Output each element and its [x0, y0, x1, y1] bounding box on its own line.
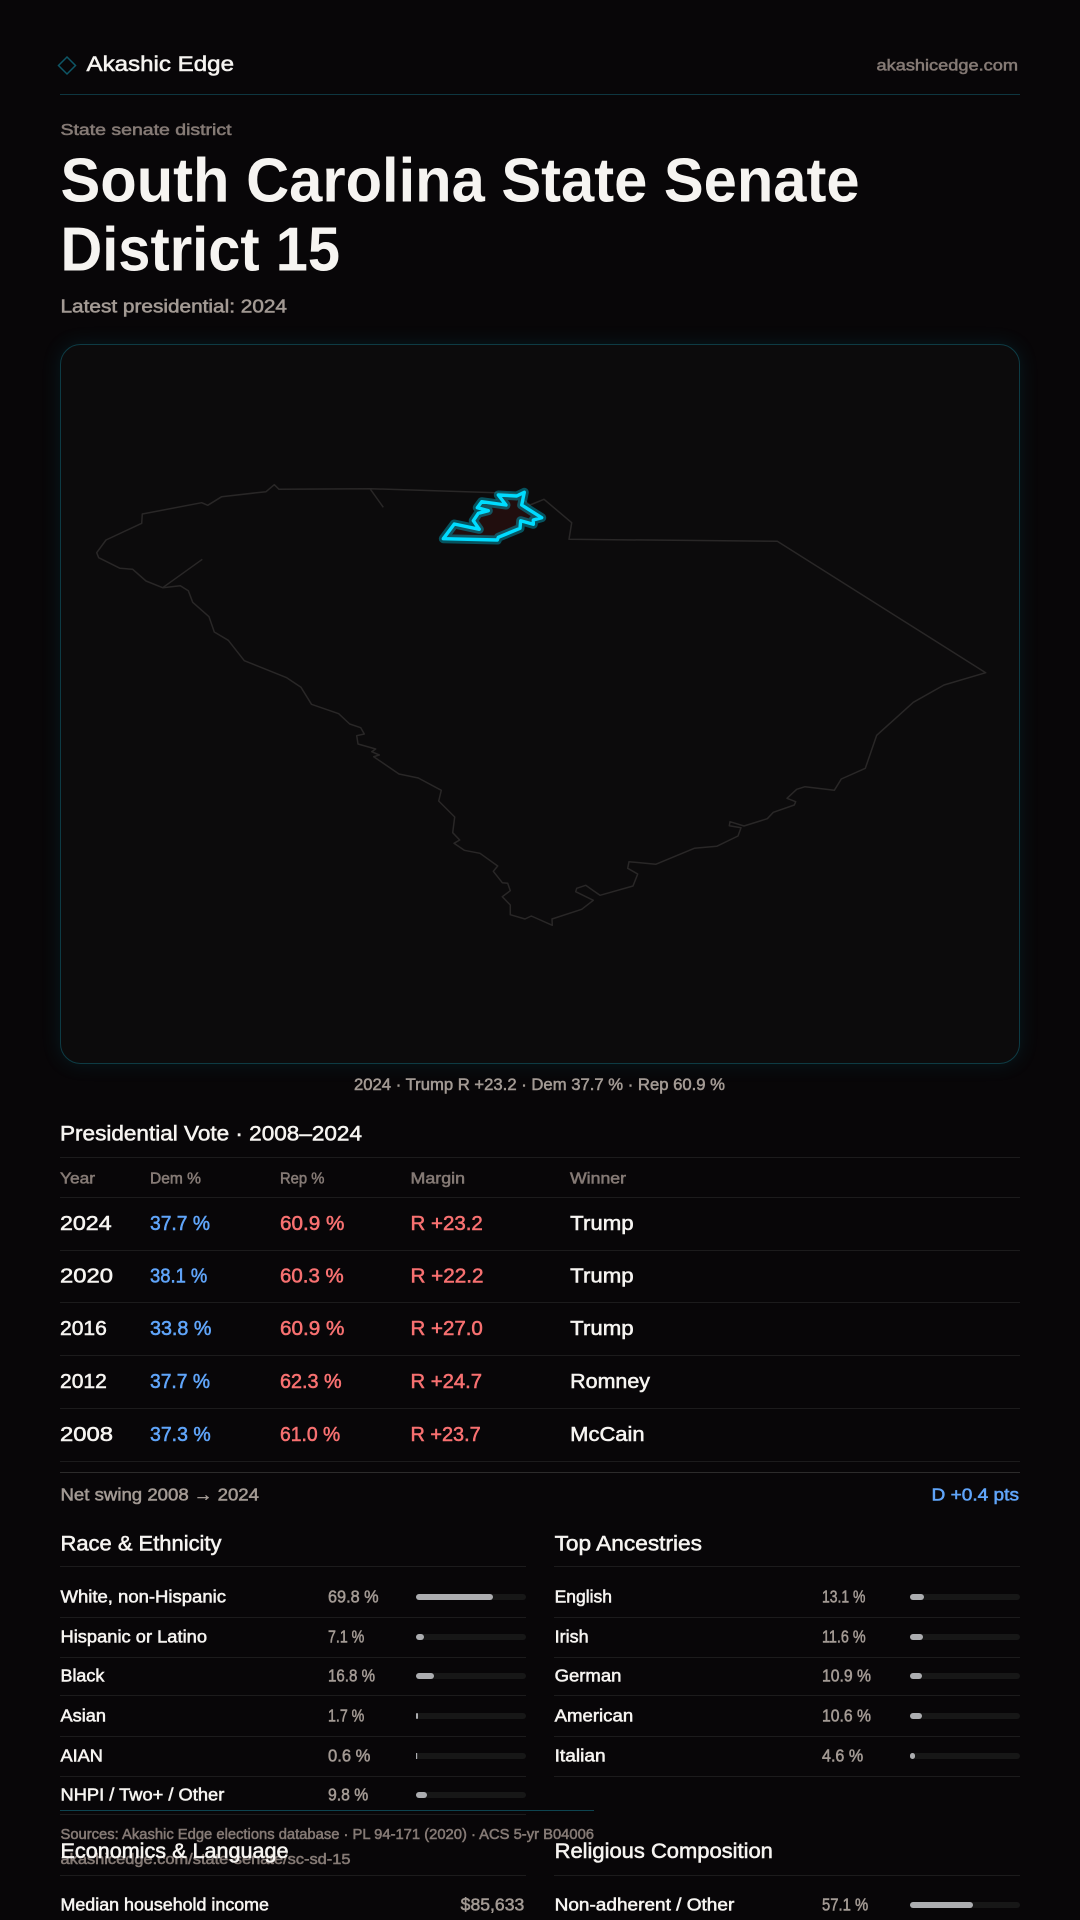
row: Black — [60, 1666, 526, 1686]
table column headers: Year — [60, 1170, 96, 1187]
row: AIAN: AIAN — [60, 1746, 103, 1766]
row 2008: 61.0 % — [280, 1424, 340, 1446]
row 2008: McCain — [570, 1424, 645, 1446]
row: Italian — [555, 1746, 1020, 1766]
row: English: 13.1 % — [822, 1587, 865, 1607]
row: Hispanic — [60, 1627, 526, 1647]
row: German: 10.9 % — [822, 1666, 871, 1686]
row 2008: 37.3 % — [150, 1424, 211, 1446]
row: White: White, non-Hispanic — [60, 1587, 226, 1607]
row: White — [60, 1587, 526, 1607]
row: American: 10.6 % — [822, 1706, 871, 1726]
row 2016: 60.9 % — [280, 1318, 345, 1340]
title: District 15 — [60, 216, 340, 285]
row 2012 — [60, 1371, 650, 1393]
row 2012: 62.3 % — [280, 1371, 342, 1393]
row 2012: 37.7 % — [150, 1371, 210, 1393]
subtitle: Latest presidential: 2024 — [60, 297, 287, 317]
row: Asian: 1.7 % — [328, 1706, 364, 1726]
map caption: 2024 · Trump R +23.2 · Dem 37.7 % · Rep 60.9 % — [354, 1075, 725, 1094]
row: Hispanic: 7.1 % — [328, 1627, 364, 1647]
row 2020: R +22.2 — [410, 1266, 484, 1288]
row 2008: R +23.7 — [410, 1424, 481, 1446]
table column headers: Margin — [410, 1170, 465, 1187]
page url: akashicedge.com/state-senate/sc-sd-15 — [60, 1851, 350, 1868]
row 2016: R +27.0 — [410, 1318, 483, 1340]
row: American: American — [555, 1706, 633, 1726]
row: Black: Black — [60, 1666, 105, 1686]
title: South Carolina State Senate — [60, 147, 860, 216]
row: Italian: 4.6 % — [822, 1746, 863, 1766]
net swing summary — [60, 1472, 1020, 1505]
row: Asian — [60, 1706, 526, 1726]
row: Irish: Irish — [555, 1627, 589, 1647]
panel: economics and language — [60, 1840, 526, 1915]
kicker: State senate district — [60, 122, 232, 139]
row: Italian: Italian — [555, 1746, 606, 1766]
highlighted district 15 — [443, 492, 542, 540]
heading: Race & Ethnicity — [60, 1533, 222, 1556]
row 2008: 2008 — [60, 1424, 113, 1446]
heading: Economics & Language — [60, 1840, 288, 1863]
table column headers: Rep % — [280, 1170, 324, 1187]
row 2020: 38.1 % — [150, 1266, 207, 1288]
icon: brand diamond — [58, 57, 76, 74]
row 2016: 2016 — [60, 1318, 107, 1340]
table column headers: Dem % — [150, 1170, 201, 1187]
heading: Religious Composition — [555, 1840, 773, 1863]
row 2024: Trump — [570, 1213, 634, 1235]
header — [58, 53, 1020, 95]
row: Asian: Asian — [60, 1706, 106, 1726]
row 2024: 2024 — [60, 1213, 112, 1235]
row: NHPI: 9.8 % — [328, 1785, 368, 1805]
row: Black: 16.8 % — [328, 1666, 375, 1686]
site url: akashicedge.com — [876, 57, 1018, 74]
row: income: Median household income — [60, 1895, 269, 1915]
row 2024: 37.7 % — [150, 1213, 210, 1235]
panel: presidential vote table — [60, 1123, 1020, 1462]
row 2012: R +24.7 — [410, 1371, 482, 1393]
table column headers: Winner — [570, 1170, 627, 1187]
row: income: $85,633 — [461, 1895, 524, 1915]
row 2016: 33.8 % — [150, 1318, 212, 1340]
row 2020: Trump — [570, 1266, 634, 1288]
row 2016 — [60, 1318, 634, 1340]
row 2008 — [60, 1424, 645, 1446]
row: English — [555, 1587, 1020, 1607]
row: non-adherent — [555, 1895, 1020, 1915]
panel: religious composition — [554, 1840, 1020, 1915]
title — [60, 147, 860, 285]
row: Irish — [555, 1627, 1020, 1647]
row: American — [555, 1706, 1020, 1726]
row: non-adherent: 57.1 % — [822, 1895, 868, 1915]
row: AIAN — [60, 1746, 526, 1766]
panel: race and ethnicity — [60, 1533, 526, 1815]
heading: Top Ancestries — [555, 1533, 702, 1556]
row 2012: 2012 — [60, 1371, 107, 1393]
sources line: Sources: Akashic Edge elections database · PL 94-171 (2020) · ACS 5-yr B04006 — [60, 1826, 594, 1843]
brand name: Akashic Edge — [86, 53, 234, 76]
row 2024: 60.9 % — [280, 1213, 345, 1235]
footer sources — [60, 1810, 594, 1868]
row: NHPI — [60, 1785, 526, 1805]
row: Hispanic: Hispanic or Latino — [60, 1627, 207, 1647]
row: German: German — [555, 1666, 621, 1686]
row 2024: R +23.2 — [410, 1213, 483, 1235]
row: White: 69.8 % — [328, 1587, 379, 1607]
row: Irish: 11.6 % — [822, 1627, 866, 1647]
panel: top ancestries — [554, 1533, 1020, 1777]
row 2012: Romney — [570, 1371, 650, 1393]
row 2016: Trump — [570, 1318, 634, 1340]
header rule — [60, 94, 1020, 95]
row 2020 — [60, 1266, 634, 1288]
panel: district map — [60, 344, 1020, 1064]
row 2020: 60.3 % — [280, 1266, 344, 1288]
net swing summary: Net swing 2008 → 2024 — [60, 1485, 259, 1505]
row: English: English — [555, 1587, 612, 1607]
row: income — [60, 1895, 524, 1915]
row 2020: 2020 — [60, 1266, 113, 1288]
row: AIAN: 0.6 % — [328, 1746, 370, 1766]
row: non-adherent: Non-adherent / Other — [555, 1895, 734, 1915]
state outline — [97, 485, 986, 925]
row 2024 — [60, 1213, 634, 1235]
table column headers — [60, 1170, 627, 1187]
row: NHPI: NHPI / Two+ / Other — [60, 1785, 224, 1805]
net swing summary: D +0.4 pts — [932, 1485, 1019, 1505]
table heading: Presidential Vote · 2008–2024 — [60, 1123, 362, 1146]
row: German — [555, 1666, 1020, 1686]
